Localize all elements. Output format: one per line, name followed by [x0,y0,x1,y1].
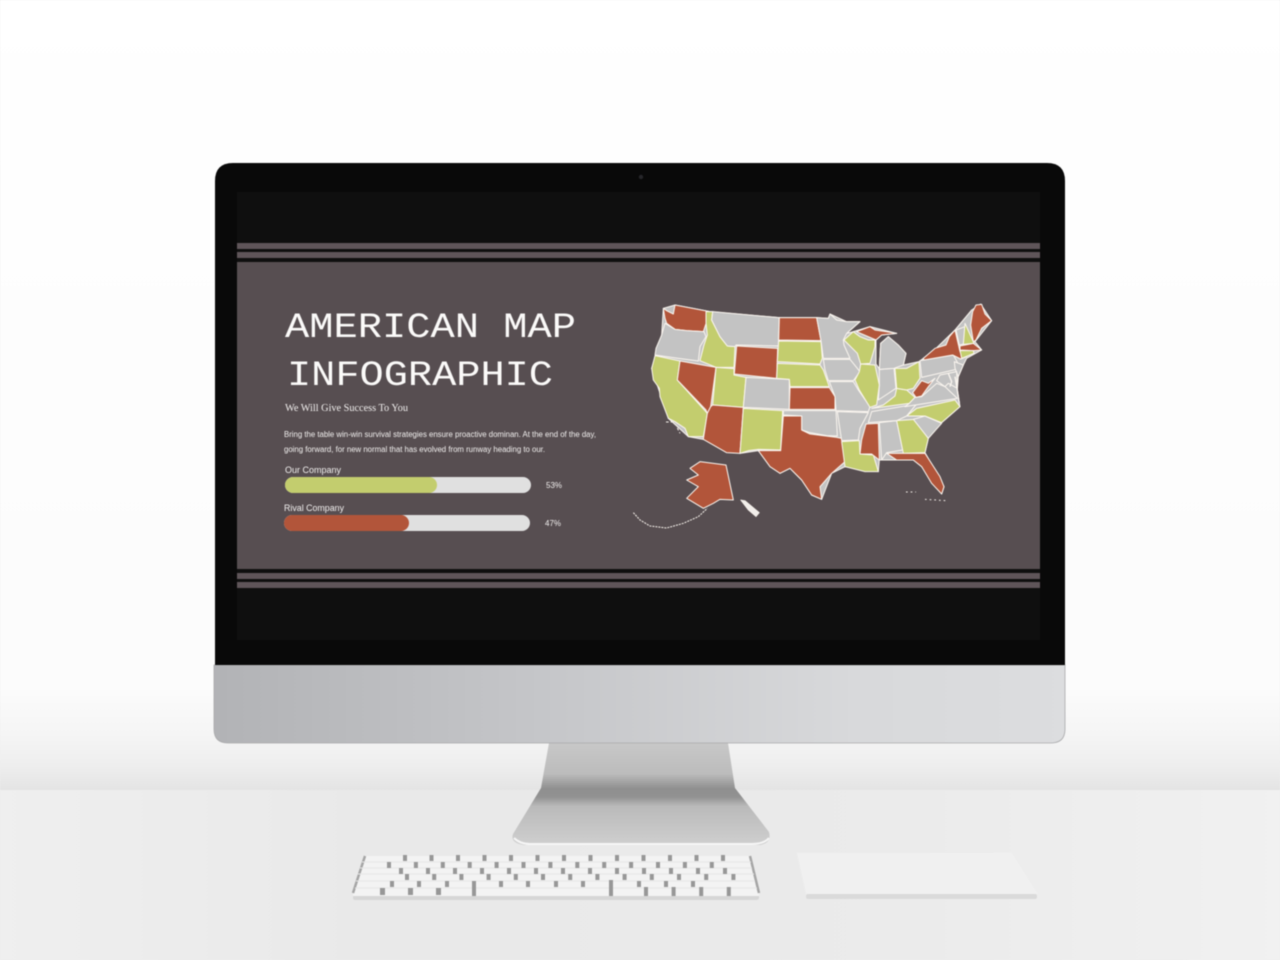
wisconsin [844,332,875,364]
aleutian islands [633,508,707,528]
ohio [895,362,920,390]
monitor bezel [215,163,1065,665]
pennsylvania [920,355,961,377]
arizona [703,405,743,453]
idaho [700,312,735,367]
connecticut and rhode island [960,351,974,358]
illinois [855,364,879,407]
our company bar: Our Company [285,465,341,475]
california [652,356,707,437]
california islands [666,422,680,433]
screen area [237,192,1040,640]
south carolina [913,416,942,438]
body text: Bring the table win-win survival strategies ensure proactive dominan. At the end of the day, [284,430,596,439]
slide top stripes [237,243,1040,258]
map silhouette backing [652,304,992,499]
body text [284,430,596,454]
iowa [823,359,860,381]
washington [663,305,710,332]
chesapeake coastline [948,373,959,403]
kansas [789,388,835,409]
rival company bar: 47% [545,519,561,528]
our company bar: 53% [546,481,562,490]
new york [923,330,967,360]
north dakota [779,318,821,341]
michigan lower peninsula [879,337,906,369]
louisiana [842,441,878,472]
rival company bar [284,503,561,531]
wyoming [734,346,778,378]
slide bottom stripes [237,573,1040,588]
nebraska [777,363,829,387]
montana [712,312,779,347]
florida keys [906,492,946,501]
new jersey [954,362,963,377]
virginia [905,383,957,407]
nevada [677,361,716,413]
maine [971,304,992,342]
kentucky [872,388,915,408]
utah [713,367,746,407]
colorado [743,377,789,409]
oklahoma [783,411,837,436]
vermont [956,327,965,345]
arkansas [837,412,868,441]
mississippi [860,423,879,460]
title: INFOGRAPHIC [287,356,553,396]
oregon [655,323,706,361]
massachusetts [960,343,982,351]
north carolina [907,400,960,423]
maryland and delaware [937,372,957,388]
new hampshire [963,323,974,344]
slide panel [237,262,1040,569]
camera [639,175,643,179]
body text: going forward, for new normal that has evolved from runway heading to our. [284,445,545,454]
west virginia [913,378,935,397]
background: desk [0,790,1280,960]
michigan upper peninsula [857,327,897,340]
texas [758,416,845,499]
trackpad [797,853,1037,899]
new mexico [740,408,783,453]
missouri [829,382,870,412]
our company bar [285,465,562,493]
us map [633,304,992,528]
title [285,308,576,396]
rival company bar: Rival Company [284,503,344,513]
subtitle: We Will Give Success To You [285,403,408,414]
indiana [878,368,896,400]
south dakota [777,341,822,364]
alaska panhandle [741,500,759,517]
alabama [879,421,903,460]
georgia [897,419,928,453]
tennessee [868,404,917,423]
title: AMERICAN MAP [285,308,576,348]
alaska [687,462,733,508]
keyboard [353,855,759,900]
keyboard keys [380,855,735,896]
minnesota [817,314,860,358]
monitor chin [214,665,1065,743]
florida [887,453,944,494]
monitor stand [512,743,770,845]
